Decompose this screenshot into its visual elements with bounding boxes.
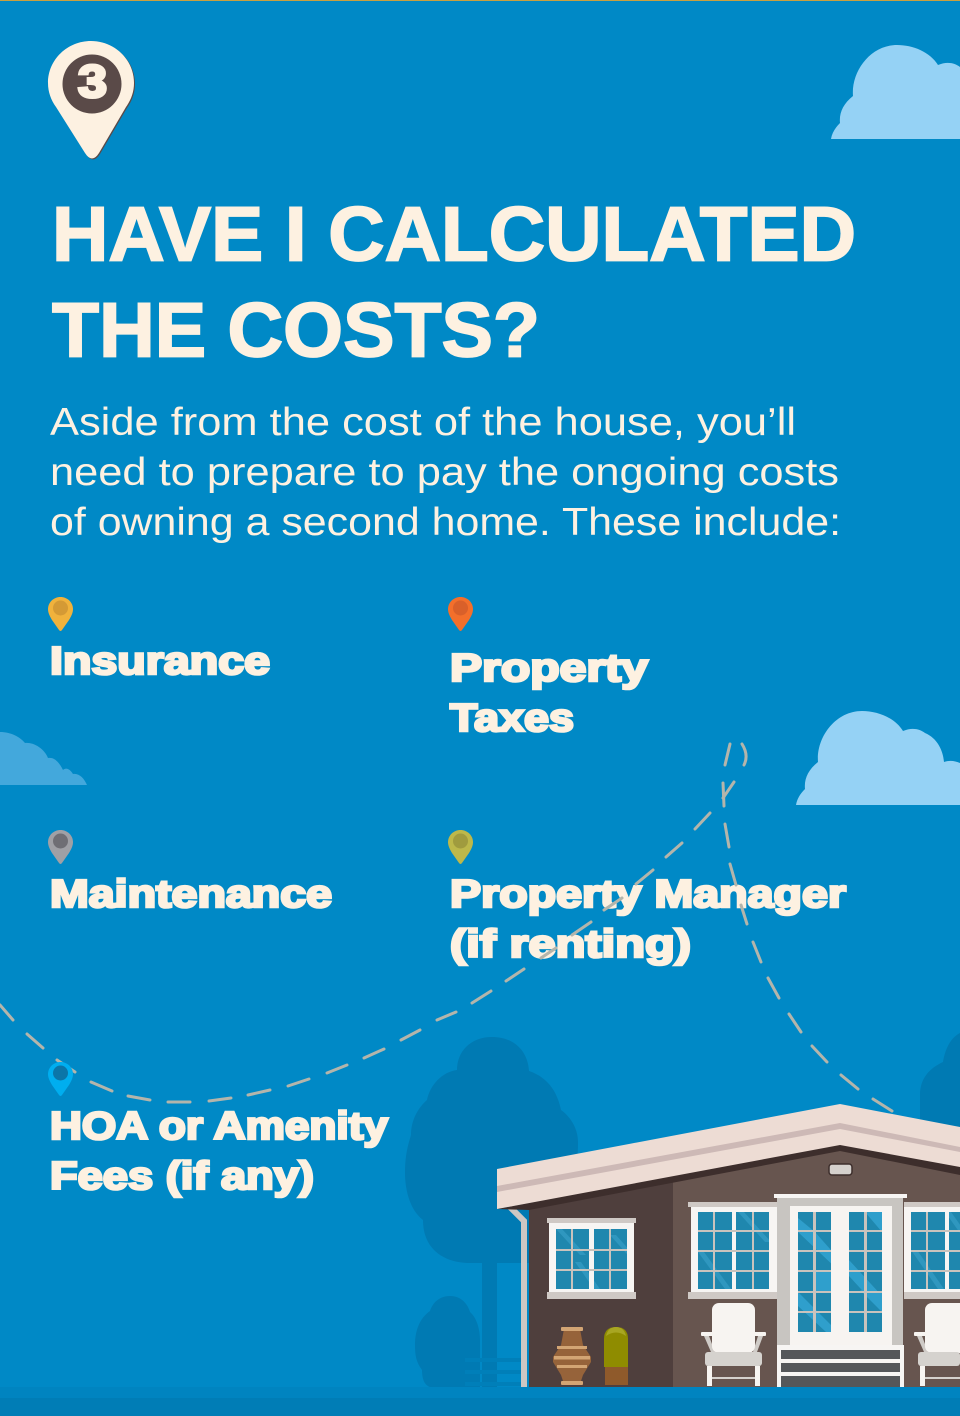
roof (497, 1104, 960, 1210)
intro text: need to prepare to pay the ongoing costs (50, 451, 839, 494)
list item: HOA fees (50, 1105, 388, 1198)
potted plant (604, 1327, 628, 1385)
tree: large silhouette (405, 1037, 578, 1387)
house (497, 1104, 960, 1387)
intro text (50, 401, 841, 544)
list item: property manager: (if renting) (450, 923, 691, 966)
bush and fence silhouette (415, 1296, 522, 1387)
heading: HAVE I CALCULATED (52, 192, 856, 278)
pin: property manager (448, 830, 473, 864)
chair: right (914, 1303, 960, 1386)
window: front right (904, 1202, 960, 1299)
window: left wall (547, 1218, 640, 1299)
list item: maintenance: Maintenance (50, 873, 332, 916)
list item: property manager (450, 873, 846, 966)
intro text: Aside from the cost of the house, you’ll (50, 401, 796, 444)
list item: HOA fees: HOA or Amenity (50, 1105, 388, 1148)
pin marker: step 3 (48, 41, 135, 160)
vase (553, 1327, 591, 1385)
heading: THE COSTS? (52, 288, 540, 374)
intro text: of owning a second home. These include: (50, 501, 841, 544)
list item: property manager: Property Manager (450, 873, 846, 916)
cloud: left (0, 732, 87, 785)
bottom ground band (0, 1387, 960, 1416)
left dark wall (529, 1168, 673, 1387)
porch steps (777, 1345, 904, 1387)
pin: insurance (48, 597, 73, 631)
gutter downpipe (510, 1207, 524, 1387)
heading (52, 192, 856, 374)
pin: HOA fees (48, 1062, 73, 1096)
front gable wall (673, 1146, 960, 1387)
list item: property taxes: Taxes (450, 697, 574, 740)
list item: HOA fees: Fees (if any) (50, 1155, 314, 1198)
window: front left (688, 1202, 777, 1299)
tree: right edge silhouette (920, 1033, 960, 1140)
list item: property taxes: Property (450, 647, 648, 690)
french door (774, 1194, 907, 1345)
dashed route lines (0, 744, 892, 1111)
attic vent (829, 1164, 852, 1175)
chair: left (701, 1303, 766, 1386)
cloud: top right (831, 45, 960, 139)
list item: property taxes (450, 647, 648, 740)
cloud: middle right (796, 711, 960, 805)
list item: insurance: Insurance (50, 640, 270, 683)
pin: maintenance (48, 830, 73, 864)
pin: property taxes (448, 597, 473, 631)
pin marker: step 3: 3 (78, 56, 107, 107)
